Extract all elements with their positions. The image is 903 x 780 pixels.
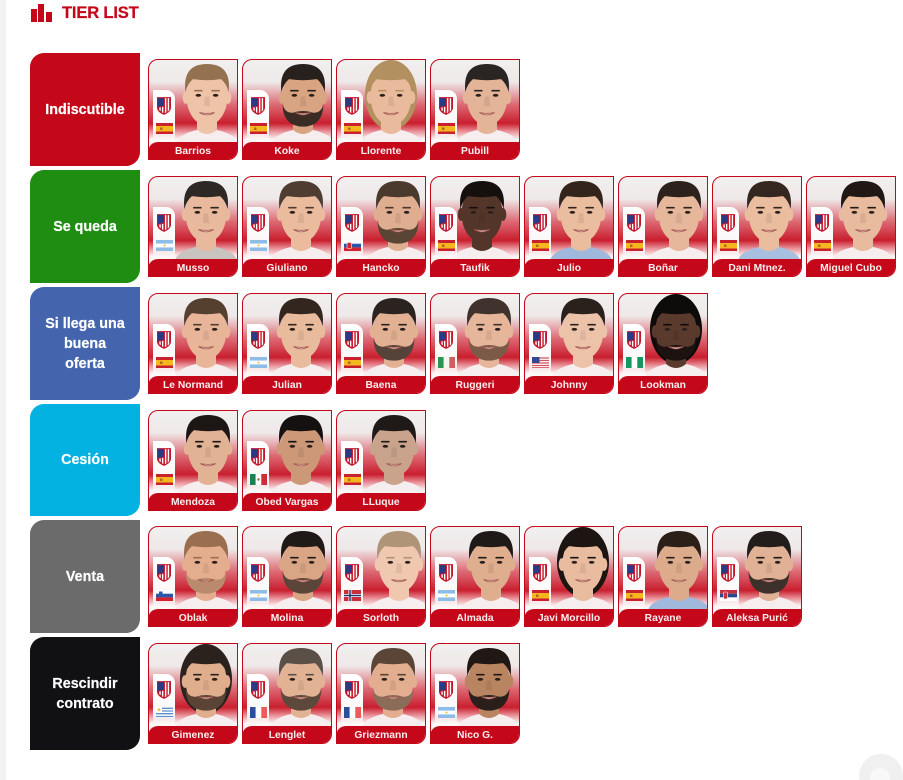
- player card: Lookman: [618, 293, 708, 394]
- tier label: Rescindir contrato: contrato: [56, 696, 114, 712]
- player card: Koke: Koke: [274, 146, 300, 157]
- player card: LLuque: LLuque: [362, 497, 400, 508]
- tier label: Si llega una buena oferta: buena: [64, 336, 106, 352]
- player card: Obed Vargas: [242, 410, 332, 511]
- player card: Julio: [524, 176, 614, 277]
- tier label: Cesión: [30, 404, 140, 516]
- player card: Lenglet: Lenglet: [269, 730, 305, 741]
- player card: Giuliano: Giuliano: [266, 263, 308, 274]
- player card: Sorloth: Sorloth: [363, 613, 399, 624]
- player card: Baena: Baena: [366, 380, 396, 391]
- player card: Almada: Almada: [456, 613, 494, 624]
- player card: Barrios: Barrios: [175, 146, 211, 157]
- player card: Pubill: Pubill: [461, 146, 489, 157]
- tier label: Venta: [30, 520, 140, 633]
- player card: Almada: [430, 526, 520, 627]
- player card: Boñar: [618, 176, 708, 277]
- player card: Llorente: [336, 59, 426, 160]
- player card: Rayane: [618, 526, 708, 627]
- player card: Le Normand: [148, 293, 238, 394]
- player card: Ruggeri: [430, 293, 520, 394]
- player card: Javi Morcillo: [524, 526, 614, 627]
- player card: Dani Mtnez.: [712, 176, 802, 277]
- player card: Mendoza: Mendoza: [171, 497, 215, 508]
- player card: Taufik: Taufik: [460, 263, 490, 274]
- player card: Baena: [336, 293, 426, 394]
- player card: Julio: Julio: [557, 263, 581, 274]
- player card: Julian: [242, 293, 332, 394]
- player card: Lookman: Lookman: [640, 380, 686, 391]
- tier label: Rescindir contrato: Rescindir: [52, 676, 118, 692]
- player card: Obed Vargas: Obed Vargas: [256, 497, 318, 508]
- player card: Javi Morcillo: Javi Morcillo: [538, 613, 600, 624]
- player card: Oblak: [148, 526, 238, 627]
- tier label: Si llega una buena oferta: Si llega una: [45, 316, 125, 332]
- tier label: Indiscutible: Indiscutible: [45, 102, 125, 118]
- player card: Giuliano: [242, 176, 332, 277]
- player card: Ruggeri: Ruggeri: [456, 380, 494, 391]
- player card: Nico G.: [430, 643, 520, 744]
- player card: Musso: [148, 176, 238, 277]
- player card: Aleksa Purić: [712, 526, 802, 627]
- tier label: Se queda: Se queda: [53, 218, 117, 234]
- player card: Koke: [242, 59, 332, 160]
- player card: Aleksa Purić: Aleksa Purić: [726, 613, 788, 624]
- player card: Sorloth: [336, 526, 426, 627]
- player card: Gimenez: Gimenez: [172, 730, 214, 741]
- tier label: Se queda: [30, 170, 140, 283]
- player card: Molina: Molina: [271, 613, 303, 624]
- player card: Mendoza: [148, 410, 238, 511]
- player card: Griezmann: Griezmann: [354, 730, 408, 741]
- player card: Rayane: Rayane: [645, 613, 681, 624]
- title: TIER LIST: [62, 3, 139, 22]
- icon: bar chart: [31, 4, 52, 22]
- player card: Le Normand: Le Normand: [163, 380, 223, 391]
- tier label: Indiscutible: [30, 53, 140, 166]
- player card: Miguel Cubo: Miguel Cubo: [820, 263, 882, 274]
- player card: Musso: Musso: [177, 263, 209, 274]
- tier label: Si llega una buena oferta: oferta: [65, 356, 105, 372]
- player card: Llorente: Llorente: [361, 146, 401, 157]
- player card: Lenglet: [242, 643, 332, 744]
- player card: Barrios: [148, 59, 238, 160]
- icon: floating round button: [859, 754, 903, 780]
- player card: Boñar: Boñar: [648, 263, 678, 274]
- player card: Hancko: Hancko: [362, 263, 400, 274]
- player card: Molina: [242, 526, 332, 627]
- player card: Johnny: Johnny: [551, 380, 587, 391]
- player card: Hancko: [336, 176, 426, 277]
- player card: Julian: Julian: [272, 380, 302, 391]
- tier label: Rescindir contrato: [30, 637, 140, 750]
- player card: Dani Mtnez.: Dani Mtnez.: [728, 263, 786, 274]
- player card: Johnny: [524, 293, 614, 394]
- player card: Pubill: [430, 59, 520, 160]
- player card: Gimenez: [148, 643, 238, 744]
- player card: Oblak: Oblak: [179, 613, 207, 624]
- player card: Griezmann: [336, 643, 426, 744]
- player card: Taufik: [430, 176, 520, 277]
- tier label: Venta: Venta: [66, 568, 104, 584]
- tier label: Si llega una buena oferta: [30, 287, 140, 400]
- player card: Nico G.: Nico G.: [457, 730, 493, 741]
- player card: LLuque: [336, 410, 426, 511]
- player card: Miguel Cubo: [806, 176, 896, 277]
- tier label: Cesión: Cesión: [61, 452, 109, 468]
